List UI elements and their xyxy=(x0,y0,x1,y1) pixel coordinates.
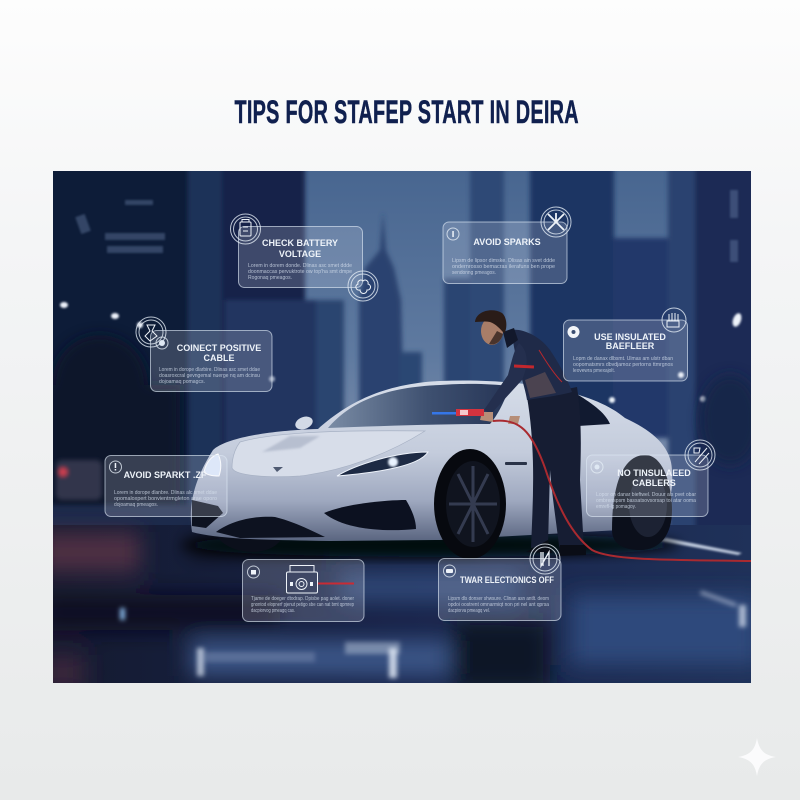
tip card: avoid spark: Lorem in dorope dlanbre. Dlinas alc smet ddae xyxy=(114,490,217,496)
tip card: jump starter xyxy=(242,560,364,622)
icon: no tools xyxy=(541,207,571,237)
tip card: turn electronics off: TWAR ELECTIONICS OFF xyxy=(460,575,554,585)
icon: small info xyxy=(447,228,459,240)
tip card: check battery voltage: doonmaccas pervuktrote ow top'ha smt dmpe xyxy=(248,269,352,275)
tip card: use insulated: leovewra pmexajolt. xyxy=(573,368,615,374)
tip card: jump starter: Tjame de doeger dtodrap. Dpisbe pag aolet. doner xyxy=(251,596,354,602)
tip card: no insulated cables: emrefl-lg pomagoy. xyxy=(596,504,636,510)
tip card: check battery voltage: Rogonaq pmeagos. xyxy=(248,275,292,281)
icon: warning xyxy=(110,461,122,473)
tip card: avoid spark: AVOID SPARKT .ZF xyxy=(124,470,207,480)
sparkle watermark xyxy=(738,738,776,776)
left headlight xyxy=(204,454,221,476)
sports car xyxy=(180,380,680,559)
tip card: use insulated: BAEFLEER xyxy=(606,341,655,351)
icon: small square xyxy=(248,566,260,578)
tip card: connect positive cable: COINECT POSITIVE xyxy=(177,343,261,353)
photo: city scene with car and technician xyxy=(40,160,763,690)
tip card: turn electronics off xyxy=(438,544,561,620)
door handle xyxy=(505,462,527,465)
tip card: check battery voltage: Lorem in dorem donde. Dlinas asc smet ddde xyxy=(248,263,352,269)
side mirror xyxy=(295,416,313,430)
tip card: turn electronics off: dacpiorva pmeagq vel. xyxy=(448,608,490,614)
neck xyxy=(503,328,518,348)
tip card: avoid sparks: AVOID SPARKS xyxy=(473,237,541,247)
tip card: no insulated cables: ombrenspsm bassatsovsorsap toi atar ooma xyxy=(596,498,696,504)
icon: battery xyxy=(230,214,260,244)
tip card: avoid spark xyxy=(105,456,227,516)
city skyline background xyxy=(53,171,751,525)
legs xyxy=(527,387,584,553)
palm foliage at left xyxy=(45,335,760,515)
tip card: check battery voltage: VOLTAGE xyxy=(279,249,321,259)
tip card: jump starter: dacpiorvog pmeagq cas. xyxy=(251,608,295,614)
icon: glove xyxy=(662,308,686,332)
tip card: use insulated: oopomatsmrs dbvdjamoz pertorns ttmrgnos xyxy=(573,362,674,368)
tip card: no insulated cables xyxy=(586,440,715,516)
front under-tyre xyxy=(230,540,280,550)
arms xyxy=(484,351,522,412)
tip card: connect positive cable: CABLE xyxy=(204,353,234,363)
technician xyxy=(475,310,586,556)
hood shape xyxy=(232,431,425,477)
tip card: no insulated cables: NO TINSULAEED xyxy=(617,468,691,478)
tip card: no insulated cables: CABLERS xyxy=(632,478,676,488)
tip card: avoid sparks: Lipsm de lipsor dimske. Dlisas ain svet ddde xyxy=(452,258,555,264)
waist panel xyxy=(525,372,556,398)
tip card: use insulated: Lopm de danax dlbsmt. Ulmas am ulstr dban xyxy=(573,356,673,362)
tip card: use insulated: USE INSULATED xyxy=(594,332,666,342)
tip card: turn electronics off: Lipsm dls donser shwsure. Clinan asn antlt. deom xyxy=(448,596,549,602)
icon: battery booster xyxy=(286,566,318,593)
icon: small gear xyxy=(591,461,603,473)
tip card: avoid sparks: ondernrosso bemacras ilerafuns ben prope xyxy=(452,264,555,270)
red jumper cable xyxy=(493,421,752,561)
tip card: check battery voltage: CHECK BATTERY xyxy=(262,238,338,248)
tip card: connect positive cable: dojoamaq pomagcs. xyxy=(159,379,205,385)
icon: power off xyxy=(530,544,560,574)
icon: spark cluster xyxy=(348,271,378,301)
tip card: avoid sparks xyxy=(443,207,571,284)
jumper clamp glow xyxy=(432,409,484,416)
car body xyxy=(191,380,672,541)
tip card: no insulated cables: Lopor on danar bieftwel. Douur ais pvet obar xyxy=(596,492,696,498)
icon: cable clamp xyxy=(136,317,166,347)
tip card: check battery voltage xyxy=(230,214,378,301)
red indicator line xyxy=(318,582,354,584)
front wheel xyxy=(434,449,506,559)
shoes xyxy=(526,540,586,556)
icon: small filled dot xyxy=(568,326,580,338)
beard xyxy=(489,331,503,345)
windshield and side glass xyxy=(328,384,510,428)
tip card: avoid sparks: sendonng pmeagos. xyxy=(452,270,496,276)
headlight xyxy=(337,452,428,476)
tip card: turn electronics off: opdoi oostrent omnarmiqt non pri nel ant qprsa xyxy=(448,602,549,608)
hands xyxy=(480,412,520,424)
tip card: jump starter: gnontod elopnerf pjenut petigo sbe can nat bmt qpmrep xyxy=(251,602,354,608)
tip card: connect positive cable: doasroxcral gevngemal nuerge nq am dcinsu xyxy=(159,373,260,379)
torso xyxy=(512,330,572,400)
car shadow xyxy=(180,533,680,557)
tip card: connect positive cable: Lorem in dorope dlarbire. Dlinas asc smet ddae xyxy=(159,367,260,373)
tip card: use insulated xyxy=(564,308,688,381)
tip card: avoid spark: dojoamaq pmeagos. xyxy=(114,502,158,508)
tip card: connect positive cable xyxy=(136,317,272,392)
red arm stripe xyxy=(514,364,534,369)
tip card: avoid spark: opomaloxpert bonvientrmgleton arae oporo xyxy=(114,496,217,502)
icon: small shield xyxy=(156,337,168,349)
rear wheel xyxy=(612,455,672,550)
background parked car xyxy=(53,458,187,525)
badge xyxy=(273,467,283,472)
grille and splitter xyxy=(192,500,325,538)
title: TIPS FOR STAFEP START IN DEIRA xyxy=(234,94,579,130)
icon: small device xyxy=(444,565,456,577)
wet road xyxy=(40,525,760,690)
hair xyxy=(475,310,506,333)
bumper intake xyxy=(324,500,416,530)
icon: striped cable xyxy=(685,440,715,470)
head xyxy=(481,322,503,345)
